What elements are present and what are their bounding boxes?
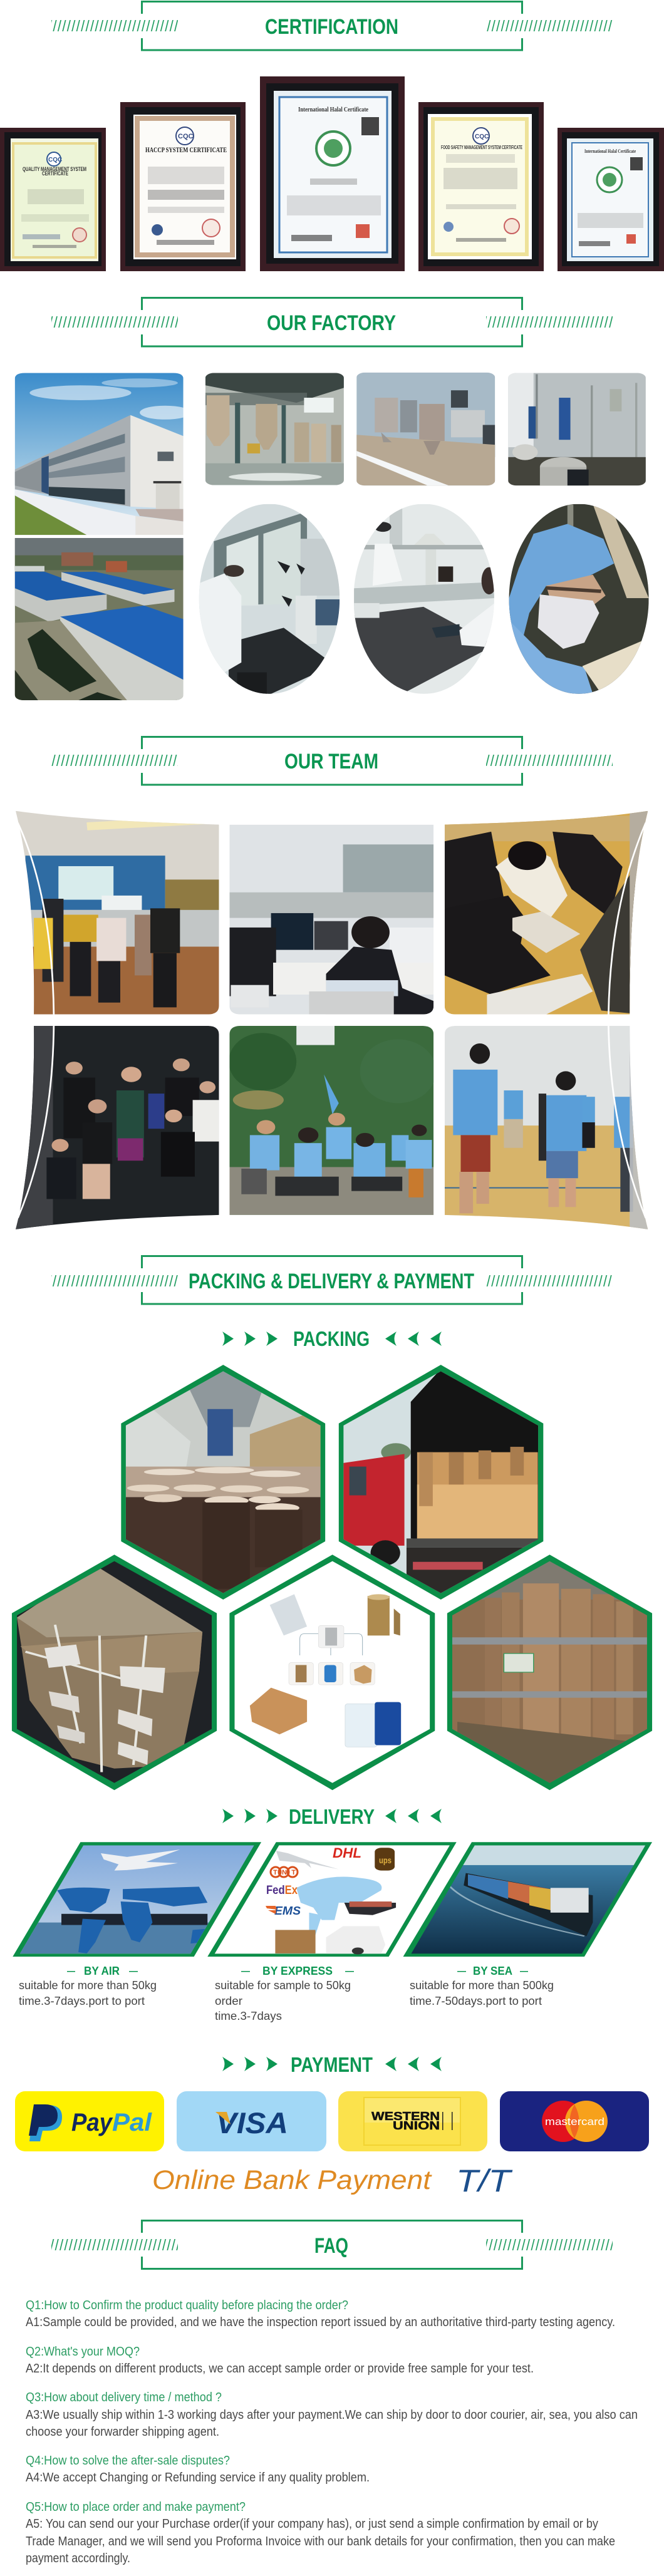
delivery: by express: TNT (273, 1869, 296, 1876)
FAQ item 5: A5: You can send our your Purchase order(if your company has), or just send a simple confirmation by email or by (26, 2517, 598, 2531)
certificate: international halal (large): International Halal Certificate (298, 106, 368, 113)
online bank payment and T/T: Online Bank Payment (152, 2165, 432, 2195)
photo: lab technician by the window (199, 504, 340, 694)
FAQ item 3: Q3:How about delivery time / method ? (26, 2391, 222, 2404)
team photo grid (16, 811, 648, 1229)
subheading: payment (222, 2053, 442, 2076)
subheading: delivery: DELIVERY (289, 1805, 375, 1828)
certificate: international halal (small): International Halal Certificate (584, 148, 636, 154)
certificate: food safety management system: CQC (475, 133, 489, 140)
delivery: by air: BY AIR (84, 1965, 120, 1977)
photo: office workstations (229, 825, 433, 1015)
photo: circle game in gym (445, 1026, 648, 1229)
card: Mastercard: mastercard (545, 2116, 604, 2128)
photo: laboratory bench (354, 504, 497, 694)
FAQ item 3 (26, 2391, 638, 2439)
certificate: food safety management system (418, 102, 544, 271)
certificate: HACCP system (120, 102, 246, 271)
delivery: by air (13, 1842, 261, 2007)
online bank payment and T/T (152, 2163, 513, 2198)
certificate: HACCP system: HACCP SYSTEM CERTIFICATE (145, 145, 227, 154)
FAQ item 5: Trade Manager, and we will send you Proforma Invoice with our bank details for your confirmation, then you can make (26, 2535, 615, 2548)
certificate: HACCP system: CQC (178, 133, 193, 140)
card: Visa: VISA (216, 2106, 288, 2139)
panel: packaging options diagram (229, 1554, 435, 1790)
photo: drums loaded on truck (339, 1365, 543, 1600)
delivery: by express: order (215, 1995, 242, 2007)
certificate: food safety management system: FOOD SAFETY MANAGEMENT SYSTEM CERTIFICATE (441, 145, 522, 150)
delivery: by express: ups (379, 1855, 392, 1865)
FAQ item 2: Q2:What's your MOQ? (26, 2345, 140, 2359)
delivery: by sea (403, 1842, 652, 2007)
photo: stacked fiber drums (447, 1554, 652, 1790)
FAQ item 3: choose your forwarder shipping agent. (26, 2425, 219, 2439)
photo: warehouse of drums (121, 1365, 325, 1600)
certificate: quality management system: CQC (48, 157, 62, 163)
heading: packing, delivery and payment: PACKING & DELIVERY & PAYMENT (189, 1270, 474, 1293)
heading: our factory (51, 298, 613, 346)
delivery: by express: time.3-7days (215, 2010, 282, 2022)
certificate: international halal (large) (260, 76, 405, 271)
certificate: quality management system: QUALITY MANAGEMENT SYSTEM (23, 166, 86, 172)
card: Visa (177, 2091, 326, 2151)
FAQ item 2 (26, 2345, 534, 2376)
delivery options (13, 1842, 652, 2022)
photo: factory building exterior (15, 373, 190, 535)
subheading: packing (222, 1327, 442, 1350)
delivery: by express: FedEx (266, 1884, 298, 1897)
photo: wrapped carton pallet (12, 1554, 217, 1790)
heading: certification (51, 1, 613, 50)
delivery: by express: BY EXPRESS (262, 1965, 333, 1977)
photo: reactors with blue motors (508, 373, 646, 485)
delivery: by air: time.3-7days.port to port (19, 1995, 145, 2007)
FAQ item 4: Q4:How to solve the after-sale disputes? (26, 2454, 230, 2468)
photo: aerial view of factory (15, 538, 184, 700)
factory photo collage (15, 373, 649, 700)
heading: certification: CERTIFICATION (265, 15, 398, 39)
photo: stainless steel tanks (356, 373, 495, 485)
certificate: quality management system: CERTIFICATE (42, 170, 68, 177)
FAQ item 1: Q1:How to Confirm the product quality before placing the order? (26, 2299, 348, 2312)
delivery: by express: EMS (274, 1905, 301, 1917)
photo: outdoor team building (229, 1026, 436, 1215)
FAQ item 5: payment accordingly. (26, 2552, 130, 2565)
delivery: by express (207, 1842, 457, 2022)
heading: our factory: OUR FACTORY (267, 311, 396, 335)
FAQ list (26, 2299, 638, 2565)
FAQ item 1 (26, 2299, 615, 2329)
FAQ item 5 (26, 2500, 615, 2565)
delivery: by express: suitable for sample to 50kg (215, 1979, 351, 1992)
card: PayPal: Pay (71, 2109, 113, 2136)
heading: FAQ: FAQ (314, 2234, 348, 2258)
delivery: by sea: BY SEA (473, 1965, 512, 1977)
heading: FAQ (51, 2221, 613, 2268)
delivery: by air: suitable for more than 50kg (19, 1979, 157, 1992)
subheading: packing: PACKING (293, 1327, 370, 1350)
online bank payment and T/T: T/T (456, 2163, 513, 2198)
heading: packing, delivery and payment (51, 1256, 613, 1304)
photo: extraction tanks (205, 373, 344, 485)
subheading: delivery (222, 1805, 442, 1828)
card: Mastercard (500, 2091, 649, 2151)
heading: our team: OUR TEAM (284, 750, 378, 773)
delivery: by sea: suitable for more than 500kg (410, 1979, 554, 1992)
card: Western Union (338, 2091, 487, 2151)
delivery: by sea: time.7-50days.port to port (410, 1995, 542, 2007)
certificate frames row (0, 76, 664, 271)
delivery: by express: DHL (333, 1845, 361, 1861)
photo: team reading papers on floor (445, 811, 648, 1015)
FAQ item 4 (26, 2454, 370, 2485)
certificate: international halal (small) (558, 128, 664, 271)
card: PayPal: Pal (112, 2109, 152, 2136)
packing hexagon photos (12, 1365, 652, 1790)
heading: our team (51, 737, 613, 785)
photo: meeting room (16, 811, 219, 1015)
card: PayPal (15, 2091, 164, 2151)
subheading: payment: PAYMENT (291, 2053, 373, 2076)
payment method cards (15, 2091, 649, 2151)
card: Western Union: UNION (393, 2119, 440, 2132)
photo: worker in blue protective suit (509, 504, 649, 694)
photo: executive group portrait (16, 1026, 219, 1229)
FAQ item 1: A1:Sample could be provided, and we have the inspection report issued by an authoritative third-party testing agency. (26, 2315, 615, 2329)
FAQ item 2: A2:It depends on different products, we can accept sample order or provide free sample for your test. (26, 2362, 534, 2376)
FAQ item 5: Q5:How to place order and make payment? (26, 2500, 246, 2514)
certificate: quality management system (0, 128, 106, 271)
FAQ item 4: A4:We accept Changing or Refunding service if any quality problem. (26, 2471, 370, 2485)
card: Western Union: WESTERN (371, 2110, 440, 2123)
